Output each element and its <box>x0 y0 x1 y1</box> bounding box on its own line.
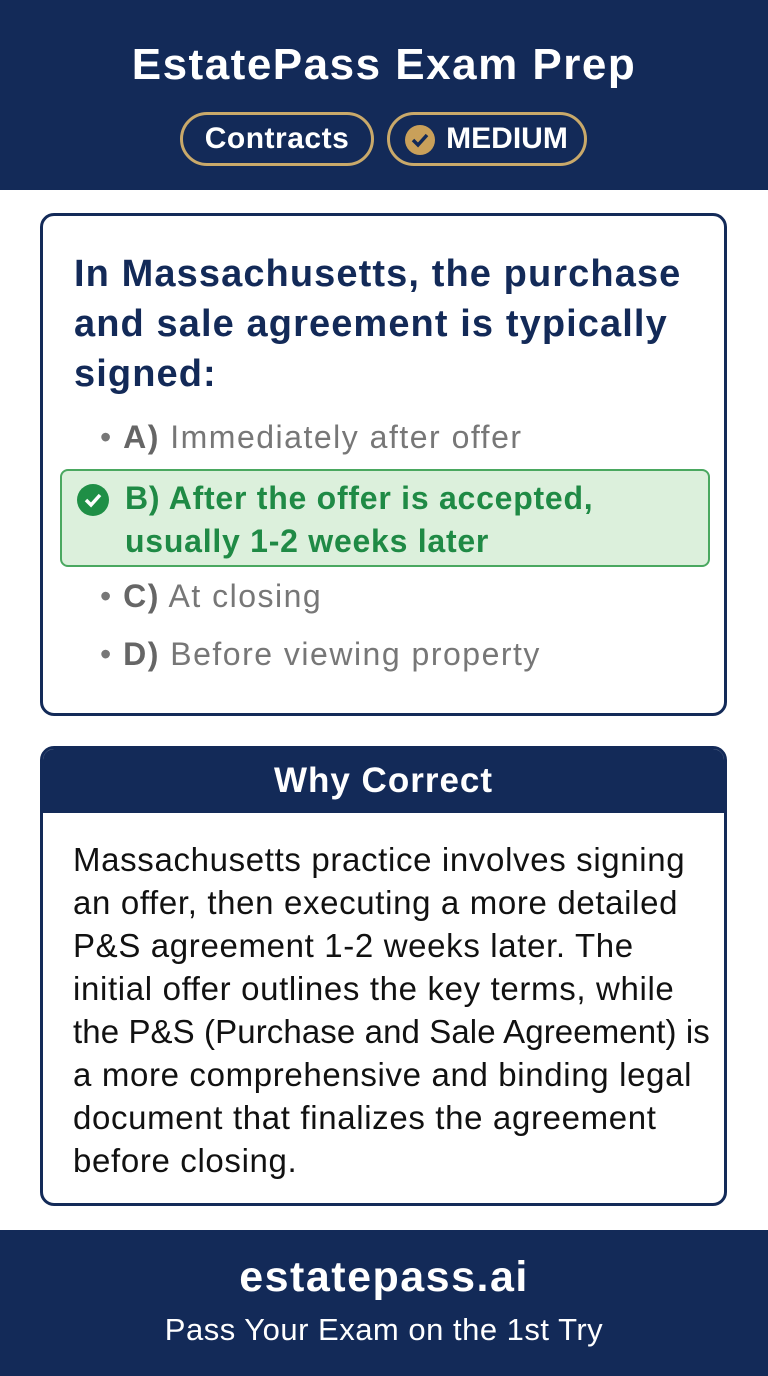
question text: signed: <box>74 353 217 395</box>
option B correct <box>60 469 710 567</box>
option B correct: B) After the offer is accepted, <box>125 480 593 516</box>
pill: difficulty <box>387 112 587 166</box>
explanation text <box>73 841 710 1179</box>
explanation text: P&S agreement 1-2 weeks later. The <box>73 927 634 964</box>
question text <box>74 253 681 395</box>
panel: why correct <box>40 746 727 1206</box>
question text: In Massachusetts, the purchase <box>74 253 681 295</box>
explanation text: document that finalizes the agreement <box>73 1099 657 1136</box>
explanation text: initial offer outlines the key terms, while <box>73 970 674 1007</box>
question text: and sale agreement is typically <box>74 303 668 345</box>
footer site name: estatepass.ai <box>239 1253 529 1301</box>
panel: question <box>40 213 727 716</box>
pill: category: Contracts <box>205 122 349 155</box>
icon: check circle <box>77 484 109 516</box>
icon: badge check <box>405 125 435 155</box>
panel heading: Why Correct <box>274 761 493 800</box>
pill: difficulty: MEDIUM <box>446 122 568 155</box>
pill: category <box>180 112 374 166</box>
footer <box>0 1230 768 1376</box>
explanation text: a more comprehensive and binding legal <box>73 1056 692 1093</box>
explanation text: the P&S (Purchase and Sale Agreement) is <box>73 1013 710 1050</box>
header band <box>0 0 768 190</box>
title: EstatePass Exam Prep <box>132 40 636 89</box>
option D: • D) Before viewing property <box>100 636 541 672</box>
explanation text: before closing. <box>73 1142 297 1179</box>
tagline: Pass Your Exam on the 1st Try <box>165 1312 603 1347</box>
option A: • A) Immediately after offer <box>100 419 523 455</box>
option C: • C) At closing <box>100 578 322 614</box>
option B correct: usually 1-2 weeks later <box>125 523 489 559</box>
explanation text: an offer, then executing a more detailed <box>73 884 678 921</box>
panel heading <box>43 749 724 813</box>
explanation text: Massachusetts practice involves signing <box>73 841 685 878</box>
